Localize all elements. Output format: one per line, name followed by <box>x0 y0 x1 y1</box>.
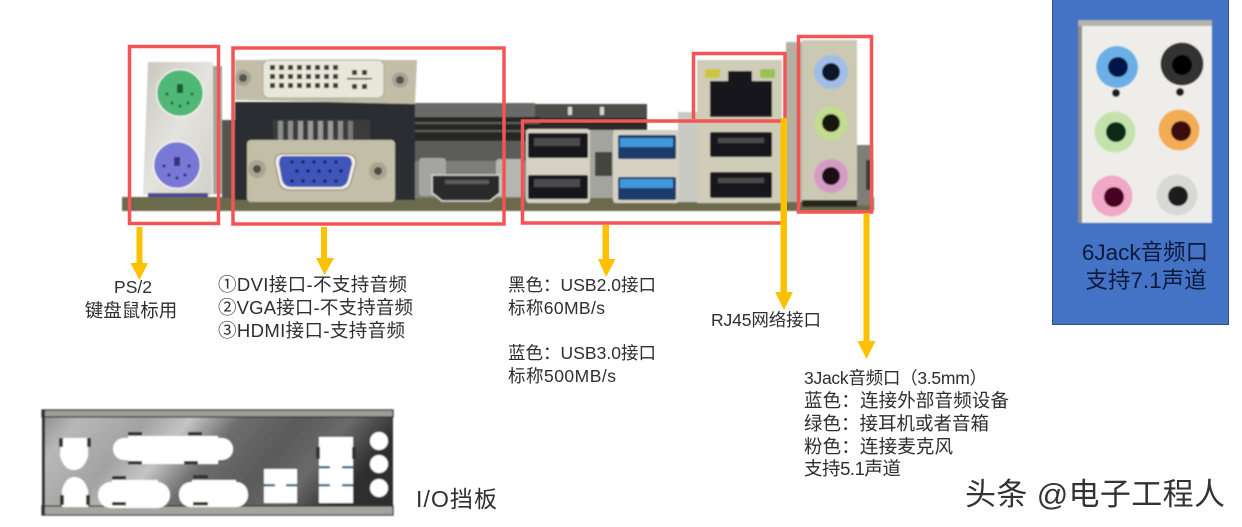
icon: blue jack <box>1096 46 1138 88</box>
RJ45 and USB block <box>697 60 782 203</box>
label: RJ45: RJ45网络接口 <box>711 310 821 330</box>
red box: video ports <box>233 48 504 224</box>
label: 3-jack audio: 绿色：接耳机或者音箱 <box>804 413 989 434</box>
USB 3.0 blue stack <box>613 130 679 203</box>
dark connector block <box>235 102 415 200</box>
motherboard photo <box>122 40 874 211</box>
arrow: audio <box>858 213 876 359</box>
icon: RJ45 socket <box>705 69 775 117</box>
icon: green jack <box>1094 112 1136 152</box>
label: 3-jack audio: 3Jack音频口（3.5mm） <box>804 368 987 388</box>
grill <box>273 120 370 144</box>
label: 3-jack audio: 粉色：连接麦克风 <box>804 436 953 457</box>
red box: audio <box>798 36 872 212</box>
heatsink <box>415 103 698 202</box>
I/O shield <box>42 410 393 515</box>
photo: 6-jack bracket <box>1078 20 1212 223</box>
label: 3-jack audio: 支持5.1声道 <box>804 458 901 479</box>
label: USB: 标称500MB/s <box>508 366 616 386</box>
DVI port <box>235 60 417 104</box>
PCB strip <box>122 197 874 211</box>
label: 3-jack audio: 蓝色：连接外部音频设备 <box>804 390 1009 411</box>
arrow: RJ45 <box>775 118 793 310</box>
icon: grey jack <box>1156 174 1198 216</box>
label: PS/2: PS/2 <box>114 277 152 297</box>
label: video ports <box>218 274 413 341</box>
label: USB: 标称60MB/s <box>508 298 605 318</box>
arrow: USB <box>598 225 616 277</box>
red box: USB <box>522 121 782 223</box>
panel caption: 支持7.1声道 <box>1085 268 1207 293</box>
panel caption <box>1082 240 1208 293</box>
HDMI port <box>432 175 500 201</box>
icon: black jack <box>1160 42 1204 86</box>
watermark: 头条 @电子工程人 <box>965 477 1225 512</box>
icon: purple PS/2 port <box>154 142 200 188</box>
icon: orange jack <box>1158 110 1200 150</box>
label: video ports: ②VGA接口-不支持音频 <box>218 297 413 318</box>
USB 2.0 black stack <box>526 129 590 203</box>
label: I/O shield: I/O挡板 <box>416 486 497 512</box>
capacitors <box>419 158 524 197</box>
VGA port <box>247 140 395 202</box>
red box: PS/2 <box>130 46 218 224</box>
label: video ports: ③HDMI接口-支持音频 <box>218 320 405 341</box>
icon: green PS/2 port <box>156 70 204 116</box>
icon: pink jack <box>1092 176 1132 216</box>
panel caption: 6Jack音频口 <box>1082 240 1208 265</box>
label: PS/2: 键盘鼠标用 <box>85 300 177 321</box>
arrow: video <box>316 227 334 275</box>
label: PS/2 <box>85 277 177 321</box>
icon: pink jack <box>814 159 848 193</box>
icon: green jack <box>814 106 848 140</box>
PS/2 bracket <box>143 62 235 198</box>
red box: RJ45 <box>694 54 785 119</box>
label: video ports: ①DVI接口-不支持音频 <box>218 274 407 295</box>
arrow: PS/2 <box>130 227 148 280</box>
label: 3-jack audio <box>804 368 1009 479</box>
icon: blue jack <box>814 55 848 89</box>
label: USB <box>508 275 656 386</box>
label: USB: 黑色：USB2.0接口 <box>508 275 656 295</box>
3-jack audio bracket <box>786 40 857 207</box>
panel: 6-jack audio <box>1052 0 1228 324</box>
label: USB: 蓝色：USB3.0接口 <box>508 343 656 363</box>
